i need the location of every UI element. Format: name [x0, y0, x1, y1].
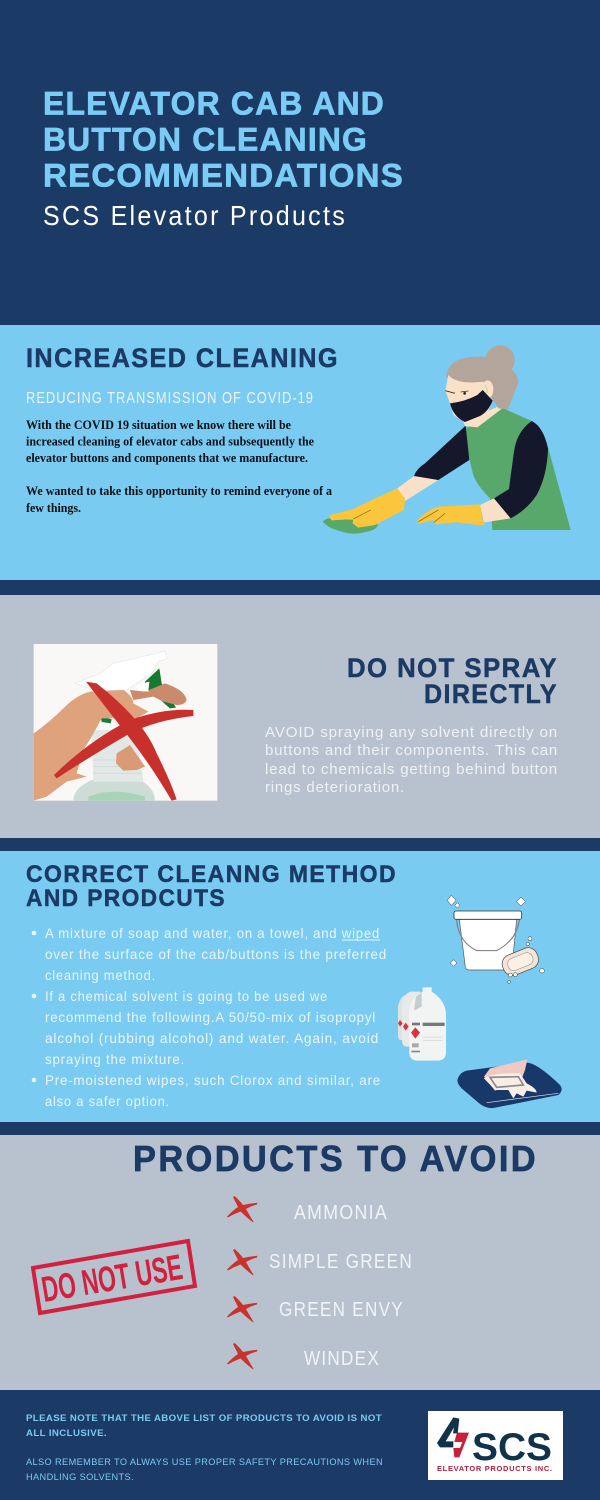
heading: do not spray directly: DO NOT SPRAY [347, 653, 558, 683]
bullet list: cleaning methods: spraying the mixture. [45, 1051, 185, 1067]
list: products to avoid [269, 1202, 413, 1370]
icon: masked woman cleaning [323, 345, 571, 534]
bullet list: cleaning methods: If a chemical solvent is going to be used we [45, 988, 328, 1004]
list: products to avoid: GREEN ENVY [279, 1299, 404, 1321]
heading: increased cleaning: INCREASED CLEANING [26, 343, 339, 373]
bullet list: cleaning methods [32, 925, 387, 1109]
text block: introduction: With the COVID 19 situation we know there will be [26, 418, 291, 432]
logo: SCS Elevator Products Inc. [428, 1411, 563, 1480]
text block: avoid spraying: rings deterioration. [265, 779, 405, 796]
panel: correct cleaning method [0, 851, 600, 1122]
icon: wipes package [457, 1059, 562, 1108]
bullet list: cleaning methods: A mixture of soap and water, on a towel, and wiped [45, 925, 380, 941]
heading: products to avoid: PRODUCTS TO AVOID [133, 1138, 538, 1179]
icon: red cross 3 [227, 1296, 257, 1322]
heading: correct cleaning method: CORRECT CLEANNG METHOD [26, 861, 397, 888]
heading: correct cleaning method: AND PRODCUTS [26, 885, 226, 912]
subheading: reducing transmission: REDUCING TRANSMISSION OF COVID-19 [26, 390, 314, 407]
text block: safety notes: ALL INCLUSIVE. [26, 1428, 107, 1439]
icon: red cross 4 [227, 1343, 257, 1369]
icon: isopropyl alcohol jugs [398, 987, 446, 1061]
list: products to avoid: SIMPLE GREEN [269, 1251, 413, 1273]
text block: introduction: We wanted to take this opportunity to remind everyone of a [26, 484, 332, 498]
icon: red cross 1 [227, 1196, 257, 1222]
heading: do not spray directly [347, 653, 558, 709]
title [43, 86, 404, 194]
panel: title header [0, 0, 600, 325]
title: BUTTON CLEANING [43, 122, 368, 158]
text block: safety notes: ALSO REMEMBER TO ALWAYS USE PROPER SAFETY PRECAUTIONS WHEN [26, 1457, 383, 1468]
text block: avoid spraying: lead to chemicals getting behind button [265, 761, 558, 778]
text block: safety notes [26, 1413, 383, 1483]
text block: introduction: few things. [26, 501, 81, 515]
photo: hand holding spray bottle crossed out [34, 644, 217, 801]
text block: safety notes: PLEASE NOTE THAT THE ABOVE LIST OF PRODUCTS TO AVOID IS NOT [26, 1413, 382, 1424]
text block: introduction [26, 418, 332, 515]
list: products to avoid: AMMONIA [294, 1202, 388, 1224]
icon: red cross 2 [227, 1249, 257, 1275]
bullet list: cleaning methods: Pre-moistened wipes, such Clorox and similar, are [45, 1072, 381, 1088]
bullet list: cleaning methods: over the surface of the cab/buttons is the preferred [45, 946, 387, 962]
stamp: do not use: DO NOT USE [39, 1246, 185, 1310]
list: products to avoid: WINDEX [304, 1348, 380, 1370]
panel: increased cleaning [0, 325, 600, 580]
logo: SCS Elevator Products Inc.: ELEVATOR PRODUCTS INC. [437, 1464, 552, 1473]
text block: safety notes: HANDLING SOLVENTS. [26, 1472, 134, 1483]
icon: bucket and soap [447, 895, 544, 983]
bullet list: cleaning methods: alcohol (rubbing alcohol) and water. Again, avoid [45, 1030, 379, 1046]
text block: introduction: elevator buttons and components that we manufacture. [26, 451, 308, 465]
bullet list: cleaning methods: also a safer option. [45, 1093, 170, 1109]
heading: do not spray directly: DIRECTLY [424, 679, 558, 709]
panel: do not spray directly [0, 595, 600, 838]
text block: introduction: increased cleaning of elevator cabs and subsequently the [26, 434, 314, 448]
panel: products to avoid [0, 1135, 600, 1390]
title: ELEVATOR CAB AND [43, 86, 385, 122]
bullet list: cleaning methods: recommend the following.A 50/50-mix of isopropyl [45, 1009, 376, 1025]
text block: avoid spraying: AVOID spraying any solvent directly on [265, 724, 558, 741]
title: RECOMMENDATIONS [43, 158, 404, 194]
logo: SCS Elevator Products Inc.: SCS [472, 1426, 552, 1469]
text block: avoid spraying [265, 724, 558, 796]
stamp: do not use [33, 1241, 195, 1313]
text block: avoid spraying: buttons and their components. This can [265, 742, 558, 759]
heading: correct cleaning method [26, 861, 397, 912]
subtitle: SCS Elevator Products [43, 200, 347, 231]
bullet list: cleaning methods: cleaning method. [45, 967, 156, 983]
panel: footer [0, 1390, 600, 1500]
